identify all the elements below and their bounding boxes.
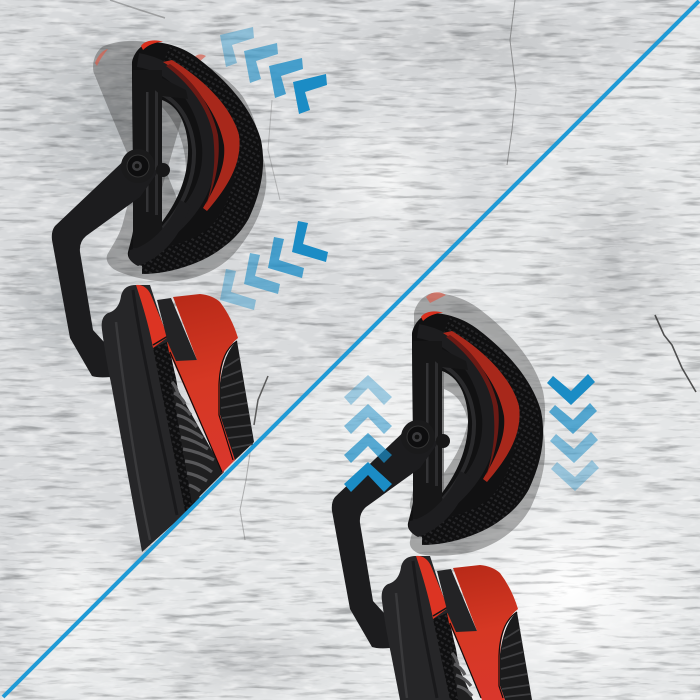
chevrons: tilt back (top): [220, 27, 327, 114]
lower chair: raised and lowered headrest: [332, 292, 545, 700]
headrest tilt ghost back: [93, 40, 256, 222]
dark notch strip: [437, 569, 477, 632]
dark notch strip: [157, 298, 197, 361]
pivot knob: [401, 420, 450, 454]
ghost red tips: [95, 49, 206, 66]
grey ribbed side: [170, 376, 224, 504]
chevrons: tilt forward (bottom): [220, 221, 328, 310]
chair arm: [52, 152, 158, 377]
black edge: [102, 285, 200, 552]
red main panel: [447, 565, 518, 700]
black ribbed panel right: [500, 612, 532, 700]
backrest: [102, 285, 254, 552]
chevrons: move down: [547, 374, 599, 491]
red main panel: [167, 294, 238, 473]
chevrons: move up: [344, 375, 392, 492]
red edge cap: [416, 556, 448, 619]
mesh side strip: [433, 613, 464, 700]
headrest ghost lowered: [410, 331, 545, 556]
black edge: [382, 556, 465, 700]
chair arm: [332, 423, 438, 648]
headrest main: [408, 311, 543, 538]
headrest ghost raised: [410, 293, 545, 518]
ghost red tip: [426, 292, 446, 303]
grey ribbed side: [450, 647, 473, 700]
backrest, cut at frame edge: [382, 556, 532, 700]
headrest tilt ghost forward: [106, 100, 266, 282]
red edge cap: [136, 285, 168, 348]
black ribbed panel right: [220, 341, 254, 461]
mesh side strip: [153, 342, 196, 516]
upper chair: tilted headrest: [52, 40, 266, 552]
pivot knob: [121, 150, 170, 178]
headrest main: [128, 40, 263, 267]
